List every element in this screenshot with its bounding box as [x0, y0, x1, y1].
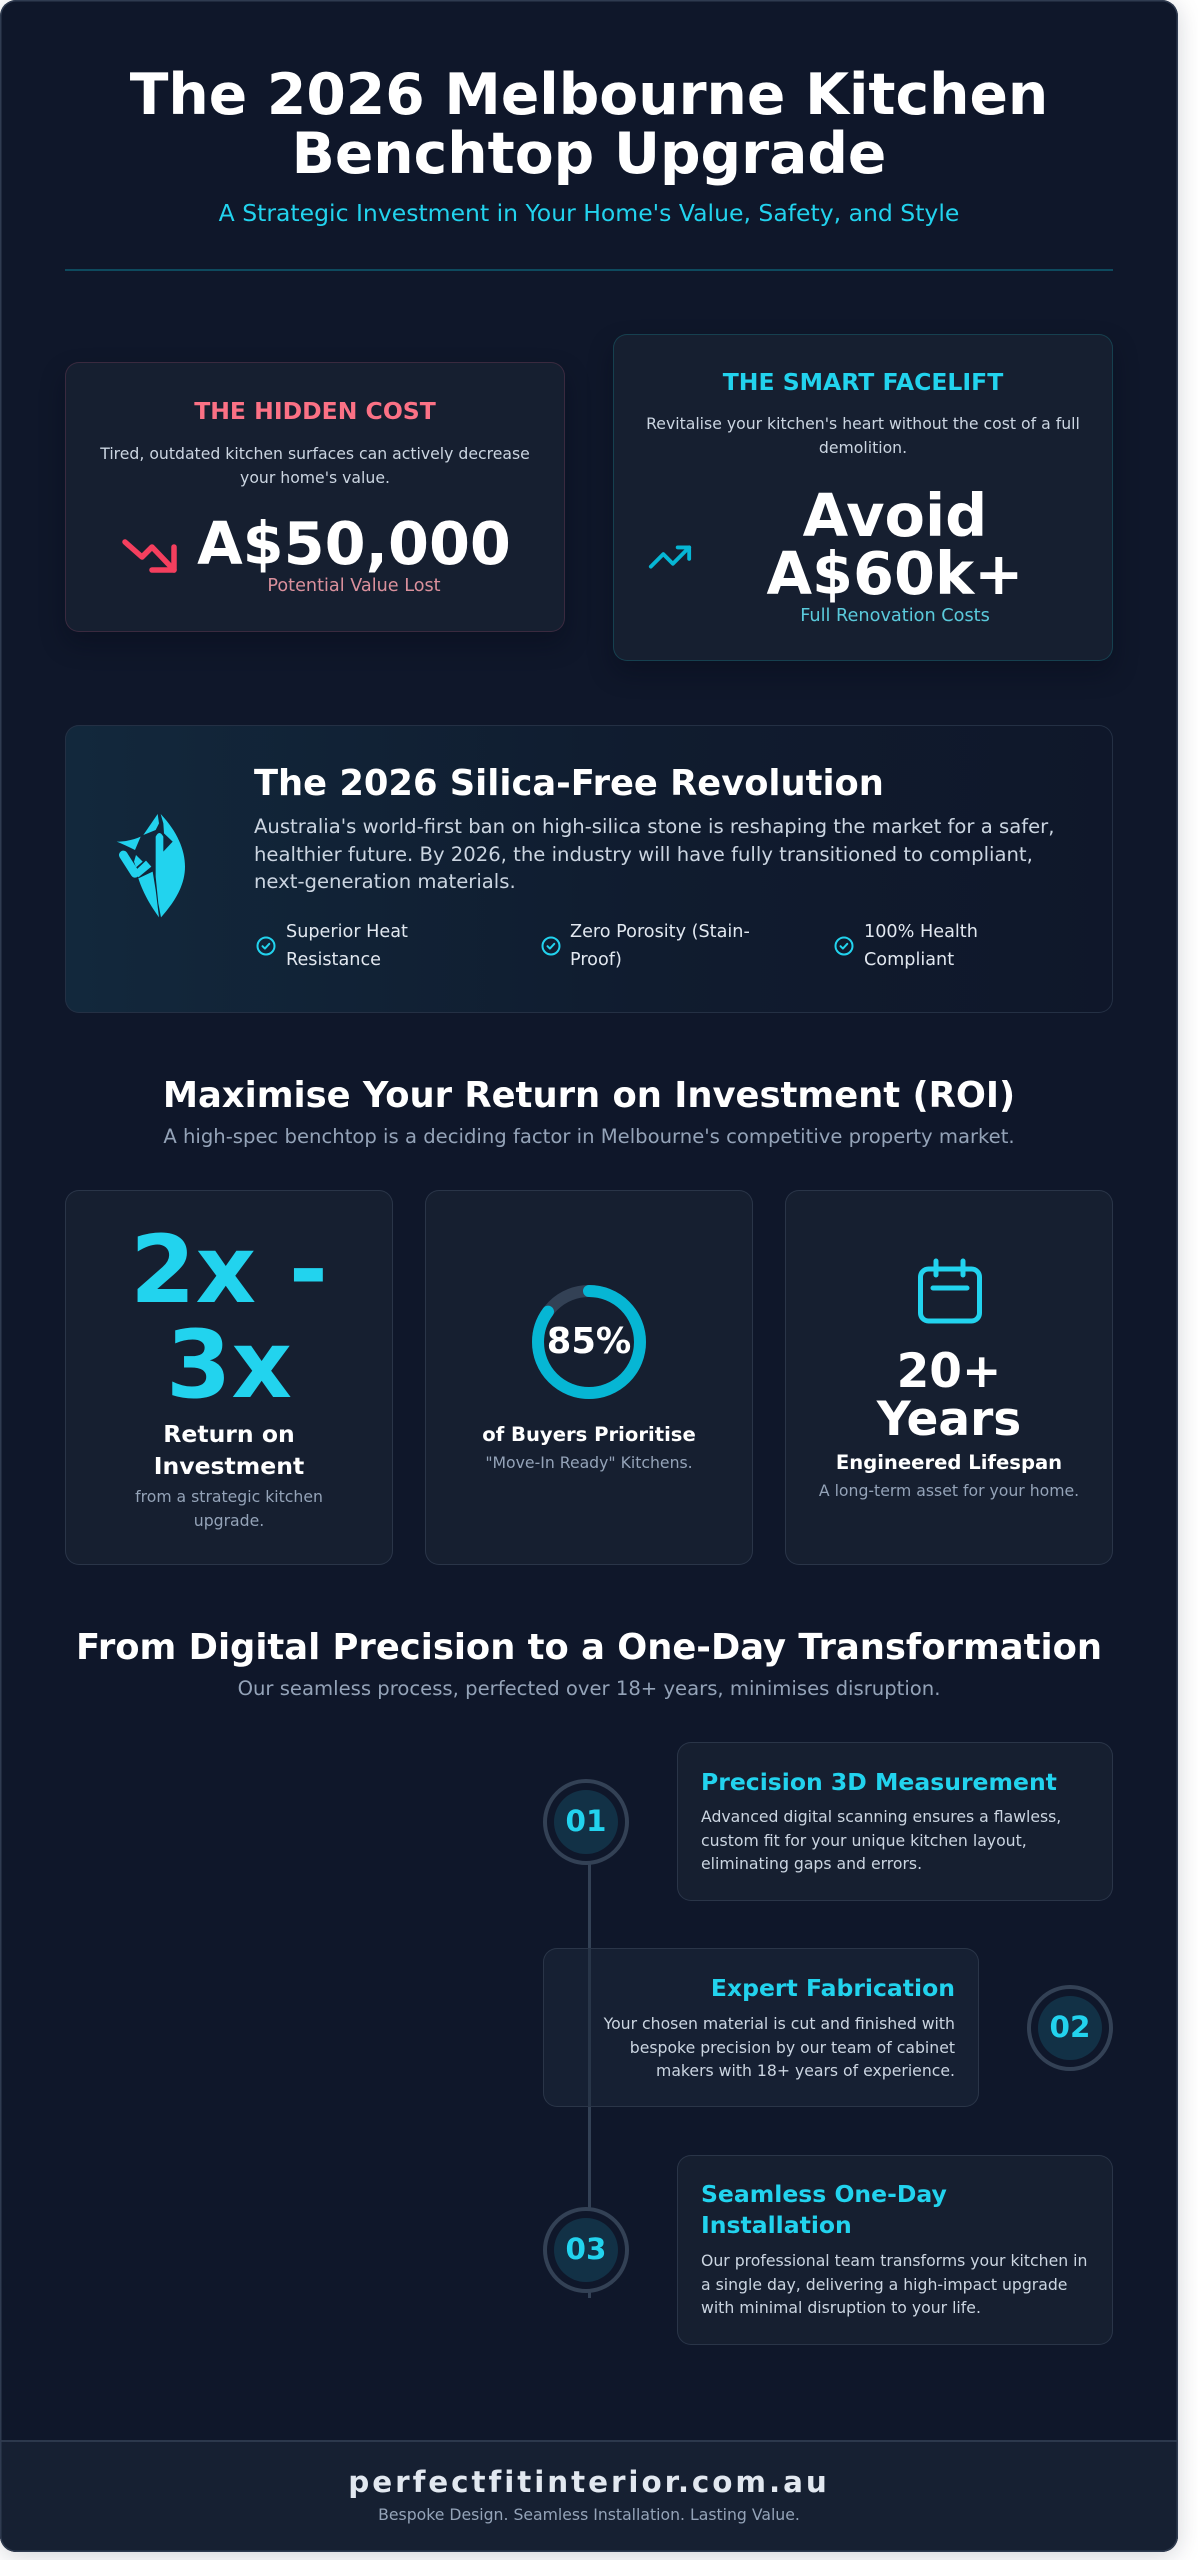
icon: trending up arrow — [648, 545, 692, 569]
step description: eliminating gaps and errors. — [701, 1854, 922, 1873]
panel: the hidden cost — [65, 362, 565, 632]
stat: A$50,000: A$50,000 — [197, 509, 511, 578]
icon: cyan gem — [116, 814, 185, 918]
text: feature label — [570, 922, 750, 970]
step description: Your chosen material is cut and finished with — [604, 2014, 955, 2033]
stat: avoid A$60k+: A$60k+ — [766, 539, 1024, 608]
text: hidden cost description: your home's value. — [240, 468, 390, 487]
text: from a strategic upgrade — [135, 1487, 323, 1530]
caption: potential value lost: Potential Value Lost — [267, 576, 441, 596]
step number: 02 — [1050, 2010, 1090, 2044]
text: feature label: 100% Health — [864, 922, 978, 942]
feature: superior heat resistance — [256, 922, 408, 970]
stat: 2x - 3x: 3x — [166, 1311, 292, 1420]
text: move-in ready kitchens: "Move-In Ready" Kitchens. — [485, 1453, 693, 1472]
text: feature label: Proof) — [570, 950, 622, 970]
heading: the smart facelift: THE SMART FACELIFT — [723, 368, 1003, 396]
heading: process: From Digital Precision to a One-Day Transformation — [76, 1627, 1102, 1668]
text: ROI subheading: A high-spec benchtop is a deciding factor in Melbourne's competitive property market. — [163, 1125, 1015, 1148]
step number: 01 — [566, 1804, 606, 1838]
step title: Seamless One-Day — [701, 2180, 947, 2208]
icon: calendar — [918, 1258, 982, 1324]
text: feature label — [286, 922, 408, 970]
step description: makers with 18+ years of experience. — [656, 2061, 955, 2080]
step title — [701, 2180, 947, 2239]
text: feature label: Zero Porosity (Stain- — [570, 922, 750, 942]
footer — [0, 2440, 1178, 2552]
heading: the hidden cost: THE HIDDEN COST — [194, 397, 436, 425]
timeline connector line — [588, 1860, 590, 2298]
step description: Advanced digital scanning ensures a flawless, — [701, 1807, 1061, 1826]
panel: buyers prioritise stat — [425, 1190, 753, 1565]
stat: avoid A$60k+ — [766, 481, 1024, 608]
icon: check circle — [542, 936, 560, 956]
footer tagline: Bespoke Design. Seamless Installation. Lasting Value. — [378, 2505, 800, 2524]
step description: a single day, delivering a high-impact upgrade — [701, 2274, 1067, 2294]
stat: 2x - 3x — [130, 1216, 328, 1420]
step title: Expert Fabrication — [711, 1974, 955, 2002]
icon: check circle — [256, 936, 276, 956]
stat: 85%: 85% — [547, 1321, 631, 1362]
step title: Installation — [701, 2211, 852, 2239]
title: The 2026 Melbourne Kitchen — [130, 62, 1048, 128]
heading: maximise ROI: Maximise Your Return on Investment (ROI) — [163, 1075, 1015, 1116]
text: feature label — [864, 922, 978, 970]
step description: Our professional team transforms your kitchen in — [701, 2251, 1087, 2270]
heading: silica-free revolution: The 2026 Silica-Free Revolution — [254, 763, 884, 804]
panel: the smart facelift — [613, 334, 1113, 661]
stat: 20+ years: 20+ — [897, 1344, 1001, 1399]
label: of buyers prioritise: of Buyers Prioritise — [482, 1423, 696, 1446]
feature: health compliant — [834, 922, 978, 970]
text: smart facelift description: demolition. — [819, 438, 907, 457]
step description: with minimal disruption to your life. — [701, 2298, 981, 2317]
footer website: perfectfitinterior.com.au — [348, 2465, 830, 2499]
title — [130, 62, 1048, 187]
panel: return on investment stat — [65, 1190, 393, 1565]
panel: engineered lifespan stat — [785, 1190, 1113, 1565]
step 2 number badge — [1027, 1985, 1113, 2071]
text: hidden cost description: Tired, outdated kitchen surfaces can actively decrease — [100, 444, 530, 463]
step description — [701, 1807, 1061, 1873]
text: from a strategic upgrade: from a strategic kitchen — [135, 1487, 323, 1506]
step number: 03 — [566, 2232, 606, 2266]
step 3 card: seamless one-day installation — [677, 2155, 1113, 2345]
icon: trending down arrow — [122, 539, 177, 573]
step description: bespoke precision by our team of cabinet — [630, 2038, 955, 2056]
stat: avoid A$60k+: Avoid — [803, 481, 987, 550]
subtitle: A Strategic Investment in Your Home's Value, Safety, and Style — [219, 199, 959, 227]
text: from a strategic upgrade: upgrade. — [194, 1511, 264, 1530]
text: feature label: Compliant — [864, 950, 954, 970]
icon: check circle — [834, 936, 854, 956]
text: smart facelift description: Revitalise your kitchen's heart without the cost of a full — [646, 414, 1080, 433]
step 2 card: expert fabrication — [543, 1948, 979, 2107]
step 1 card: precision 3D measurement — [677, 1742, 1113, 1901]
badge graphic — [1027, 1985, 1113, 2071]
text: smart facelift description — [646, 414, 1080, 457]
text: feature label: Resistance — [286, 950, 381, 970]
label: engineered lifespan: Engineered Lifespan — [836, 1451, 1062, 1474]
text: process subheading: Our seamless process, perfected over 18+ years, minimises disruption. — [238, 1677, 940, 1700]
badge graphic — [543, 2207, 629, 2293]
text: silica ban description: next-generation materials. — [254, 870, 516, 893]
text: silica ban description: Australia's world-first ban on high-silica stone is reshaping the market for a safer, — [254, 815, 1054, 838]
label: return on investment: Investment — [154, 1452, 304, 1480]
stat: 20+ years — [876, 1344, 1021, 1446]
step title: Precision 3D Measurement — [701, 1768, 1057, 1796]
chart: 85% donut ring — [532, 1285, 646, 1399]
label: return on investment — [154, 1420, 304, 1480]
text: silica ban description: healthier future. By 2026, the industry will have fully transitioned to compliant, — [254, 842, 1033, 866]
feature: zero porosity — [542, 922, 750, 970]
step 3 number badge — [543, 2207, 629, 2293]
caption: full renovation costs: Full Renovation Costs — [800, 606, 990, 626]
stat: 20+ years: Years — [877, 1392, 1021, 1446]
title: Benchtop Upgrade — [292, 121, 886, 187]
step 1 number badge — [543, 1779, 629, 1865]
label: return on investment: Return on — [163, 1420, 295, 1448]
stat: 2x - 3x: 2x - — [130, 1216, 328, 1325]
text: hidden cost description — [100, 444, 530, 487]
step description — [701, 2251, 1087, 2317]
text: silica ban description — [254, 815, 1054, 893]
header divider — [65, 269, 1113, 271]
step description — [604, 2014, 955, 2080]
step description: custom fit for your unique kitchen layout, — [701, 1830, 1027, 1850]
badge graphic — [543, 1779, 629, 1865]
text: long-term asset: A long-term asset for your home. — [819, 1481, 1079, 1500]
text: feature label: Superior Heat — [286, 922, 408, 942]
panel: silica-free revolution — [65, 725, 1113, 1013]
